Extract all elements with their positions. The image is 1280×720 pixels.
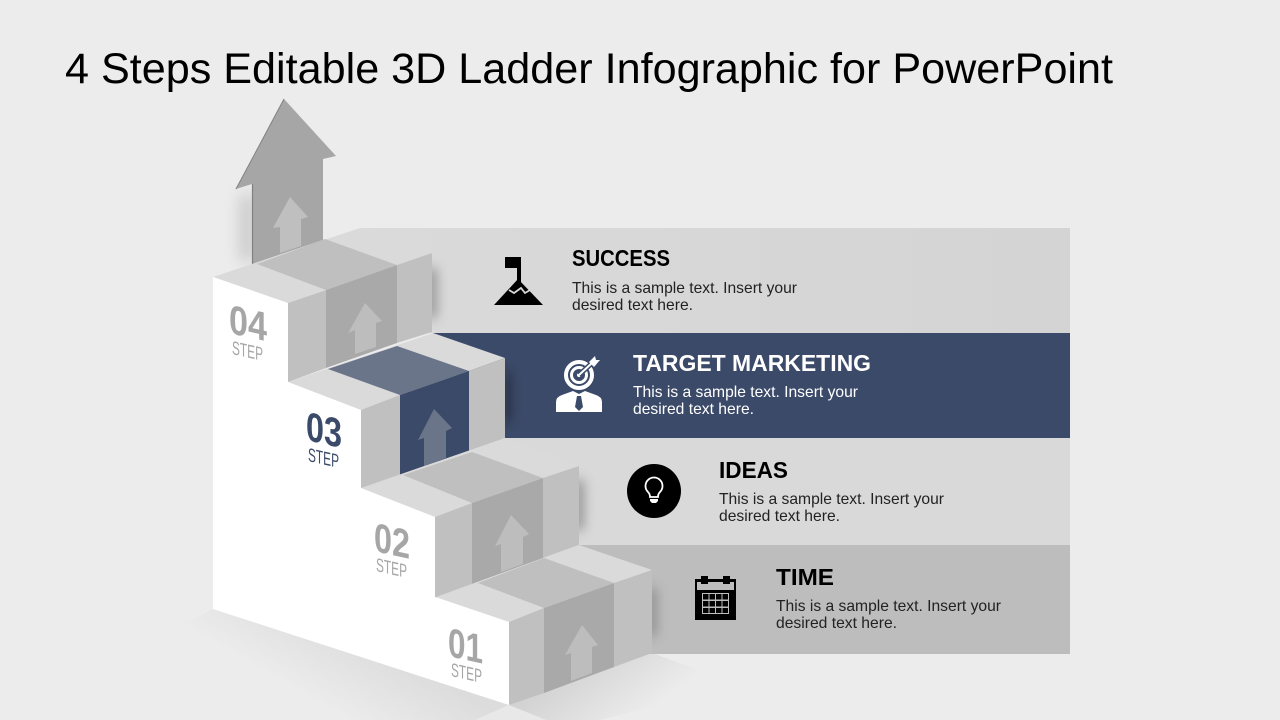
panel: ideas	[497, 438, 1070, 545]
text block: time: desired text here.	[776, 615, 897, 632]
step 4 block	[213, 228, 432, 382]
step label 03: 03	[306, 402, 342, 457]
step label 04	[229, 295, 267, 366]
text block: success: SUCCESS	[572, 245, 670, 271]
step label 03: STEP	[308, 445, 339, 473]
icon: calendar	[695, 576, 736, 620]
step label 03	[306, 402, 342, 473]
big top arrow	[236, 99, 336, 264]
step 2 block	[361, 438, 579, 598]
text block: target marketing: TARGET MARKETING	[633, 350, 871, 376]
text block: time	[776, 564, 1002, 632]
icon: flag on mountain	[494, 257, 543, 305]
icon: arrow step 1	[565, 625, 598, 681]
step label 02: STEP	[376, 555, 407, 583]
text block: time: This is a sample text. Insert your	[776, 598, 1002, 615]
text block: ideas: IDEAS	[719, 457, 788, 483]
title: 4 Steps Editable 3D Ladder Infographic for PowerPoint	[65, 45, 1113, 93]
text block: ideas	[719, 457, 945, 525]
step 1 block	[436, 545, 652, 705]
step 3 block	[288, 333, 505, 488]
step label 01: 01	[448, 618, 483, 673]
white stair front	[213, 277, 509, 705]
text block: success: This is a sample text. Insert your	[572, 280, 798, 297]
step label 04: 04	[229, 295, 267, 350]
icon: small arrow on top arrow	[273, 197, 308, 253]
step label 02: 02	[374, 513, 410, 568]
text block: target marketing: desired text here.	[633, 401, 754, 418]
text block: time: TIME	[776, 564, 834, 590]
panel: time	[579, 545, 1070, 654]
step label 02	[374, 513, 410, 583]
text block: ideas: desired text here.	[719, 508, 840, 525]
text block: success	[572, 245, 798, 314]
floor shadow	[135, 609, 740, 720]
step shadows	[242, 195, 656, 636]
step label 01: STEP	[451, 660, 482, 688]
text block: success: desired text here.	[572, 297, 693, 314]
panel: target marketing	[433, 333, 1070, 438]
panel: success	[360, 228, 1070, 333]
icon: arrow step 4	[348, 303, 382, 354]
icon: arrow step 2	[495, 515, 529, 572]
text block: target marketing: This is a sample text. Insert your	[633, 384, 859, 401]
icon: target person	[556, 356, 602, 412]
text block: ideas: This is a sample text. Insert your	[719, 491, 945, 508]
icon: arrow step 3	[418, 409, 452, 466]
icon: light bulb	[627, 464, 681, 518]
text block: target marketing	[633, 350, 871, 418]
step label 04: STEP	[232, 338, 263, 366]
step label 01	[448, 618, 483, 688]
